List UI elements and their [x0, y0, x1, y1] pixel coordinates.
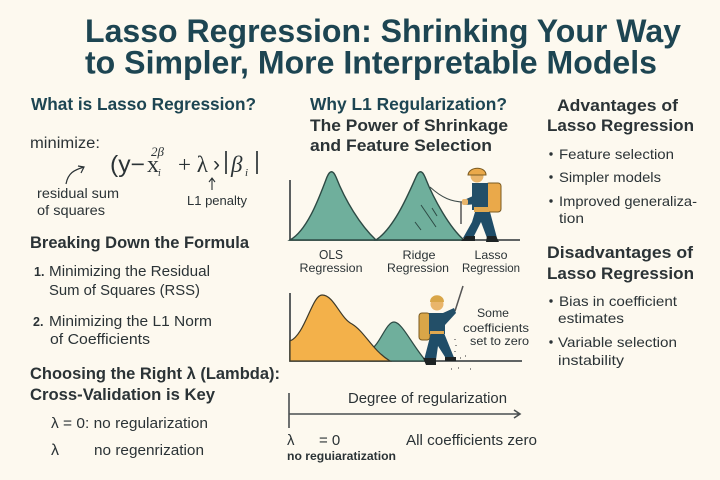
heading: why l1: Why L1 Regularization?: [310, 94, 507, 114]
title: to Simpler, More Interpretable Models: [85, 44, 657, 80]
arrow: to l1 penalty: [209, 178, 215, 190]
label: some coefficients set to zero: Some: [477, 306, 509, 320]
list: disadvantages: instability: [558, 352, 624, 368]
heading: disadvantages: Disadvantages of: [547, 243, 693, 262]
heading: advantages: [547, 96, 694, 135]
chart: degree of regularization axis: [287, 390, 537, 463]
panel: choosing lambda: [30, 365, 280, 459]
curve: teal: [370, 322, 426, 361]
panel: disadvantages: [547, 243, 694, 368]
list: disadvantages: Variable selection: [558, 334, 677, 350]
text: minimize: minimize:: [30, 135, 100, 152]
labels: regression types: [300, 248, 520, 275]
list: disadvantages: Bias in coefficient: [559, 293, 677, 309]
labels: regression types: Regression: [300, 261, 362, 275]
formula: i: [245, 167, 248, 179]
labels: regression types: Regression: [462, 261, 520, 275]
formula: β: [230, 152, 243, 177]
label: residual sum of squares: residual sum: [37, 186, 119, 201]
label: residual sum of squares: of squares: [37, 203, 105, 218]
panel: breaking down the formula: [30, 234, 250, 348]
list item 1: Minimizing the Residual: [49, 264, 210, 280]
list: advantages: Improved generaliza-: [559, 193, 697, 209]
list: disadvantages: [549, 293, 677, 368]
curve: orange: [290, 295, 390, 361]
subheading: power of shrinkage: and Feature Selection: [310, 136, 492, 155]
list: disadvantages: estimates: [558, 310, 624, 326]
list: advantages: [549, 146, 697, 226]
heading: advantages: Advantages of: [557, 96, 678, 115]
icon: hiker top: [430, 168, 501, 242]
arrow: regularization axis: [289, 393, 520, 428]
curve: ridge: [376, 172, 464, 240]
list item 1: Sum of Squares (RSS): [49, 283, 200, 299]
list item 2: Minimizing the L1 Norm: [49, 314, 212, 330]
heading: advantages: Lasso Regression: [547, 116, 694, 135]
list: advantages: Simpler models: [559, 169, 661, 185]
labels: regression types: Regression: [387, 261, 449, 275]
label: some coefficients set to zero: set to zero: [470, 334, 529, 348]
formula: x: [147, 152, 159, 178]
label: some coefficients set to zero: coefficients: [463, 321, 529, 335]
labels: regression types: Lasso: [474, 248, 508, 262]
title: [85, 13, 681, 80]
subheading: power of shrinkage: The Power of Shrinkage: [310, 116, 508, 135]
heading: choosing lambda: [30, 365, 280, 404]
title: Lasso Regression: Shrinking Your Way: [85, 13, 681, 49]
icon: hiker bottom: [419, 286, 471, 369]
label: residual sum of squares: [37, 186, 119, 218]
label: lambda zero: λ: [287, 432, 295, 449]
panel: advantages: [547, 96, 697, 226]
chart: ols ridge lasso curves: [290, 168, 520, 242]
panel: what is lasso regression: [30, 94, 257, 218]
labels: regression types: Ridge: [402, 248, 436, 262]
formula: 2β: [151, 144, 164, 159]
arrow: to residual: [66, 166, 84, 184]
label: some coefficients set to zero: [463, 306, 529, 348]
panel: why l1: [310, 94, 508, 155]
formula: (y−: [110, 151, 145, 177]
lambda row two: no regenrization: [94, 442, 204, 459]
labels: regression types: OLS: [319, 248, 343, 262]
heading: disadvantages: Lasso Regression: [547, 264, 694, 283]
formula: + λ: [178, 152, 209, 177]
label: lambda zero: = 0: [319, 432, 340, 449]
list item 1: 1.: [34, 265, 44, 279]
formula: [110, 144, 257, 179]
chart: shrinking curves: [290, 286, 529, 369]
heading: choosing lambda: Cross-Validation is Key: [30, 386, 216, 404]
label: l1 penalty: L1 penalty: [187, 194, 248, 208]
list item 2: 2.: [33, 315, 43, 329]
label: lambda zero: [287, 432, 340, 449]
lambda row two: λ: [51, 442, 59, 459]
list: advantages: tion: [559, 210, 584, 226]
heading: choosing lambda: Choosing the Right λ (Lambda):: [30, 365, 280, 383]
lambda zero row: λ = 0: no regularization: [51, 415, 208, 432]
curve: ols: [290, 172, 376, 240]
subheading: power of shrinkage: [310, 116, 508, 155]
list item 2: of Coefficients: [50, 332, 150, 348]
list: advantages: Feature selection: [559, 146, 674, 162]
formula: ›: [213, 153, 220, 176]
heading: breaking down: Breaking Down the Formula: [30, 234, 250, 252]
list item 1: [34, 264, 210, 299]
label: degree of regularization: Degree of regularization: [348, 390, 507, 407]
formula: i: [158, 168, 161, 179]
label: all coefficients zero: All coefficients zero: [406, 432, 537, 449]
heading: what is lasso: What is Lasso Regression?: [31, 94, 256, 114]
list item 2: [33, 314, 212, 348]
label: no regularization: no reguiaratization: [287, 449, 396, 463]
heading: disadvantages: [547, 243, 694, 283]
